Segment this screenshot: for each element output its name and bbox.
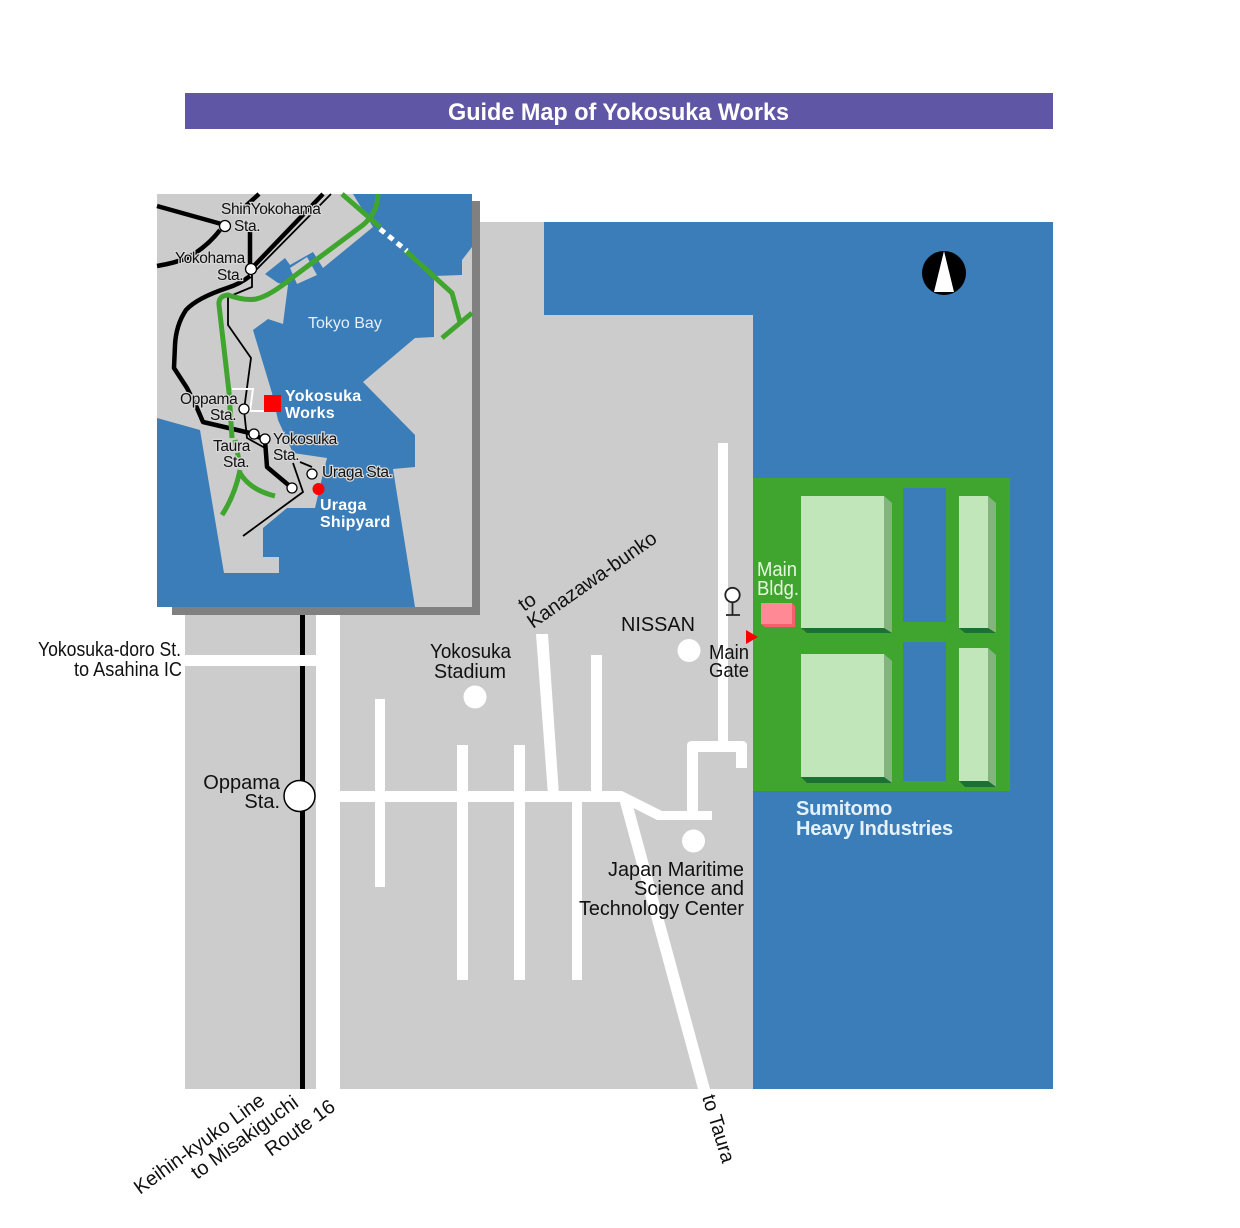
inset labels: Shipyard <box>320 514 390 531</box>
icon: police box <box>725 588 740 615</box>
label: Main Bldg. <box>757 559 799 600</box>
water channels <box>903 488 946 781</box>
inset labels: Yokosuka <box>273 431 338 448</box>
title banner: Guide Map of Yokosuka Works <box>448 99 789 126</box>
label: Japan Maritime Science and Technology Center: Technology Center <box>579 898 744 920</box>
label: Main Gate <box>709 642 749 682</box>
label: Japan Maritime Science and Technology Center: Science and <box>634 878 744 900</box>
inset labels: Sta. <box>217 267 243 284</box>
island <box>290 257 317 284</box>
inset labels: ShinYokohama <box>221 201 321 218</box>
inset labels <box>175 201 393 531</box>
label: to Misakiguchi: to Misakiguchi <box>187 1092 303 1184</box>
bridge dashes <box>380 229 407 251</box>
inset labels: Oppama <box>180 391 238 408</box>
label: NISSAN: NISSAN <box>621 614 695 636</box>
factory building upper right <box>959 496 996 633</box>
inset labels: Yokohama <box>175 250 246 267</box>
label: Sumitomo Heavy Industries: Heavy Industries <box>796 818 953 840</box>
inset labels: Sta. <box>210 407 236 424</box>
label: Keihin-kyuko Line: Keihin-kyuko Line <box>130 1090 269 1199</box>
route to works <box>232 389 264 411</box>
main map <box>38 222 1053 1199</box>
label: Main Gate: Main <box>709 642 749 664</box>
stations <box>220 220 317 493</box>
inset labels: Sta. <box>234 218 260 235</box>
factory building upper left <box>801 496 892 633</box>
panel: inset area map <box>157 194 480 615</box>
marker: Yokosuka Works <box>264 395 281 412</box>
label: Main Gate: Gate <box>709 660 749 682</box>
inset labels: Taura <box>213 438 251 455</box>
main gate marker <box>746 630 758 644</box>
inset land <box>157 194 472 607</box>
highway lines <box>219 194 472 515</box>
inset labels: Tokyo Bay <box>308 315 382 332</box>
station: Oppama <box>284 780 315 812</box>
label: Yokosuka Stadium: Yokosuka <box>430 641 512 663</box>
label: Yokosuka Stadium <box>430 641 512 708</box>
label: Oppama Sta.: Oppama <box>203 772 281 794</box>
label: to Taura: to Taura <box>697 1092 739 1166</box>
label: Main Bldg.: Bldg. <box>757 578 799 600</box>
main building <box>761 603 795 627</box>
railway line <box>300 600 305 1089</box>
sea area <box>544 222 1053 1089</box>
factory building lower left <box>801 654 892 783</box>
inset sea <box>157 194 472 607</box>
label: to Kanazawa-bunko: Kanazawa-bunko <box>523 527 661 633</box>
label: Yokosuka-doro St.: Yokosuka-doro St. <box>38 639 181 661</box>
marker: Uraga Shipyard <box>312 483 324 495</box>
icon: north arrow <box>922 251 966 295</box>
inset labels: Sta. <box>223 454 249 471</box>
label: to Kanazawa-bunko: to <box>514 589 541 616</box>
inset labels: Uraga <box>320 497 367 514</box>
label: Sumitomo Heavy Industries: Sumitomo <box>796 798 892 820</box>
inset labels: Works <box>285 405 335 422</box>
label: Yokosuka Stadium: Stadium <box>434 661 506 683</box>
label: Japan Maritime Science and Technology Center: Japan Maritime <box>608 859 744 881</box>
label: Japan Maritime Science and Technology Center <box>579 830 744 920</box>
inset labels: Sta. <box>273 447 299 464</box>
road network <box>185 443 747 1089</box>
label: Yokosuka-doro St. <box>38 639 182 681</box>
thick rail lines <box>157 194 323 488</box>
label: Oppama Sta.: Sta. <box>244 791 280 813</box>
title banner <box>185 93 1053 129</box>
thin rail lines <box>228 194 331 536</box>
inset labels: Uraga Sta. <box>322 464 393 481</box>
label: Yokosuka-doro St.: to Asahina IC <box>74 659 182 681</box>
panel: Yokosuka Works site <box>746 478 1010 791</box>
inset labels: Yokosuka <box>285 388 361 405</box>
label: Main Bldg.: Main <box>757 559 797 581</box>
factory building lower right <box>959 648 996 787</box>
label: NISSAN <box>621 614 700 662</box>
label: Route 16: Route 16 <box>261 1096 340 1161</box>
land area <box>185 222 753 1089</box>
inset shadow <box>172 201 480 615</box>
